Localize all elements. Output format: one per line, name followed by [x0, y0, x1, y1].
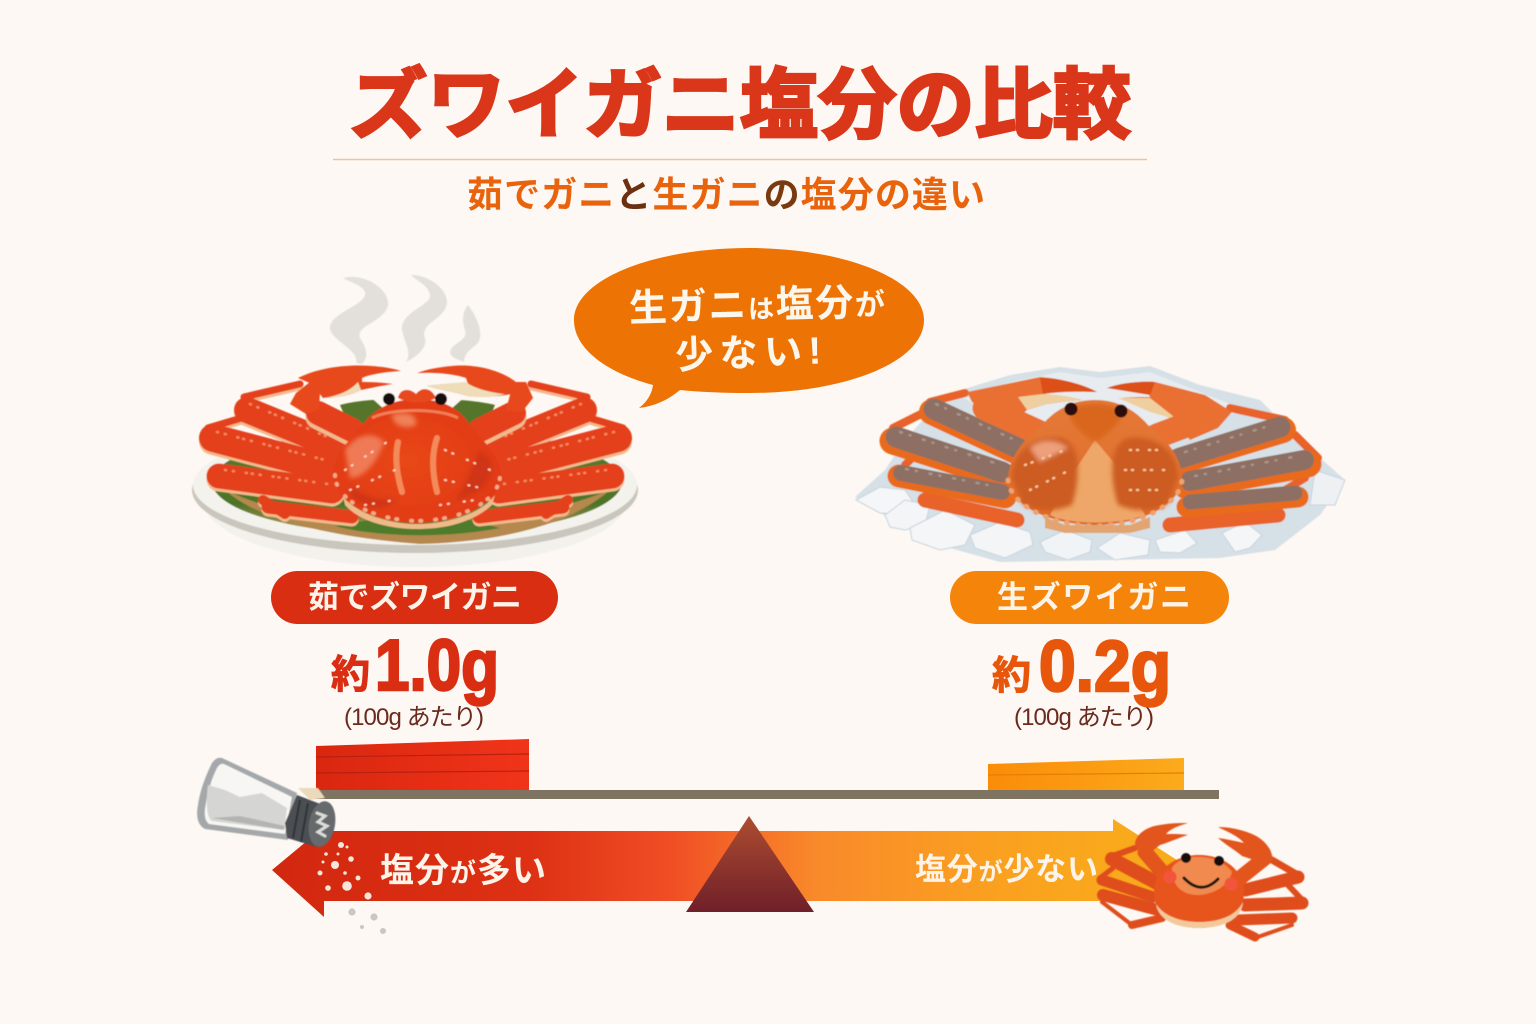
label pill: boiled crab — [271, 571, 558, 624]
right claw — [417, 366, 533, 434]
crushed ice — [855, 366, 1345, 562]
bar: boiled salt amount — [316, 739, 529, 790]
value: raw crab salt: 0.2g — [1039, 627, 1171, 707]
value: boiled crab salt: 1.0g — [375, 626, 499, 706]
value: boiled crab salt — [331, 626, 499, 731]
value: raw crab salt — [992, 627, 1171, 731]
crab body — [333, 389, 501, 529]
subtitle: 茹でガニと生ガニの塩分の違い — [467, 174, 985, 215]
smiling crab legs — [1100, 848, 1305, 938]
smiling crab body — [1154, 853, 1244, 928]
bubble text: 少ない! — [674, 330, 822, 377]
label pill: boiled crab: 茹でズワイガニ — [308, 580, 522, 615]
text: more salt: 塩分が多い — [380, 852, 546, 890]
raw crab eyes — [1064, 402, 1128, 418]
crab eyes — [383, 393, 447, 405]
illustration: raw crab on ice — [855, 366, 1345, 562]
bubble text: 生ガニは塩分が — [629, 282, 886, 330]
fulcrum triangle — [686, 816, 814, 912]
illustration: boiled crab on plate — [192, 366, 638, 567]
label pill: raw crab — [950, 571, 1229, 624]
bar: raw salt amount — [988, 758, 1184, 790]
icon: steam — [330, 275, 480, 364]
value: boiled crab salt: 約 — [331, 654, 370, 697]
raw crab claws — [967, 377, 1232, 440]
plate — [192, 382, 638, 567]
value: raw crab salt: (100g あたり) — [1014, 704, 1154, 731]
seesaw beam — [316, 790, 1219, 799]
value: raw crab salt: 約 — [992, 655, 1031, 698]
speech bubble — [574, 248, 924, 408]
icon: smiling crab — [1100, 823, 1305, 938]
crab legs and claws — [208, 366, 623, 520]
raw crab body — [1008, 400, 1182, 533]
bubble text — [629, 282, 886, 377]
label pill: raw crab: 生ズワイガニ — [997, 580, 1191, 615]
smiling crab claws — [1135, 823, 1272, 882]
left claw — [290, 366, 401, 434]
icon: salt shaker — [197, 758, 339, 849]
arrow: salt scale — [272, 819, 1180, 917]
value: boiled crab salt: (100g あたり) — [344, 704, 484, 731]
text: less salt: 塩分が少ない — [915, 852, 1098, 887]
title: ズワイガニ塩分の比較 — [349, 63, 1131, 149]
icon: falling salt grains — [318, 842, 386, 934]
raw crab legs — [893, 393, 1318, 525]
